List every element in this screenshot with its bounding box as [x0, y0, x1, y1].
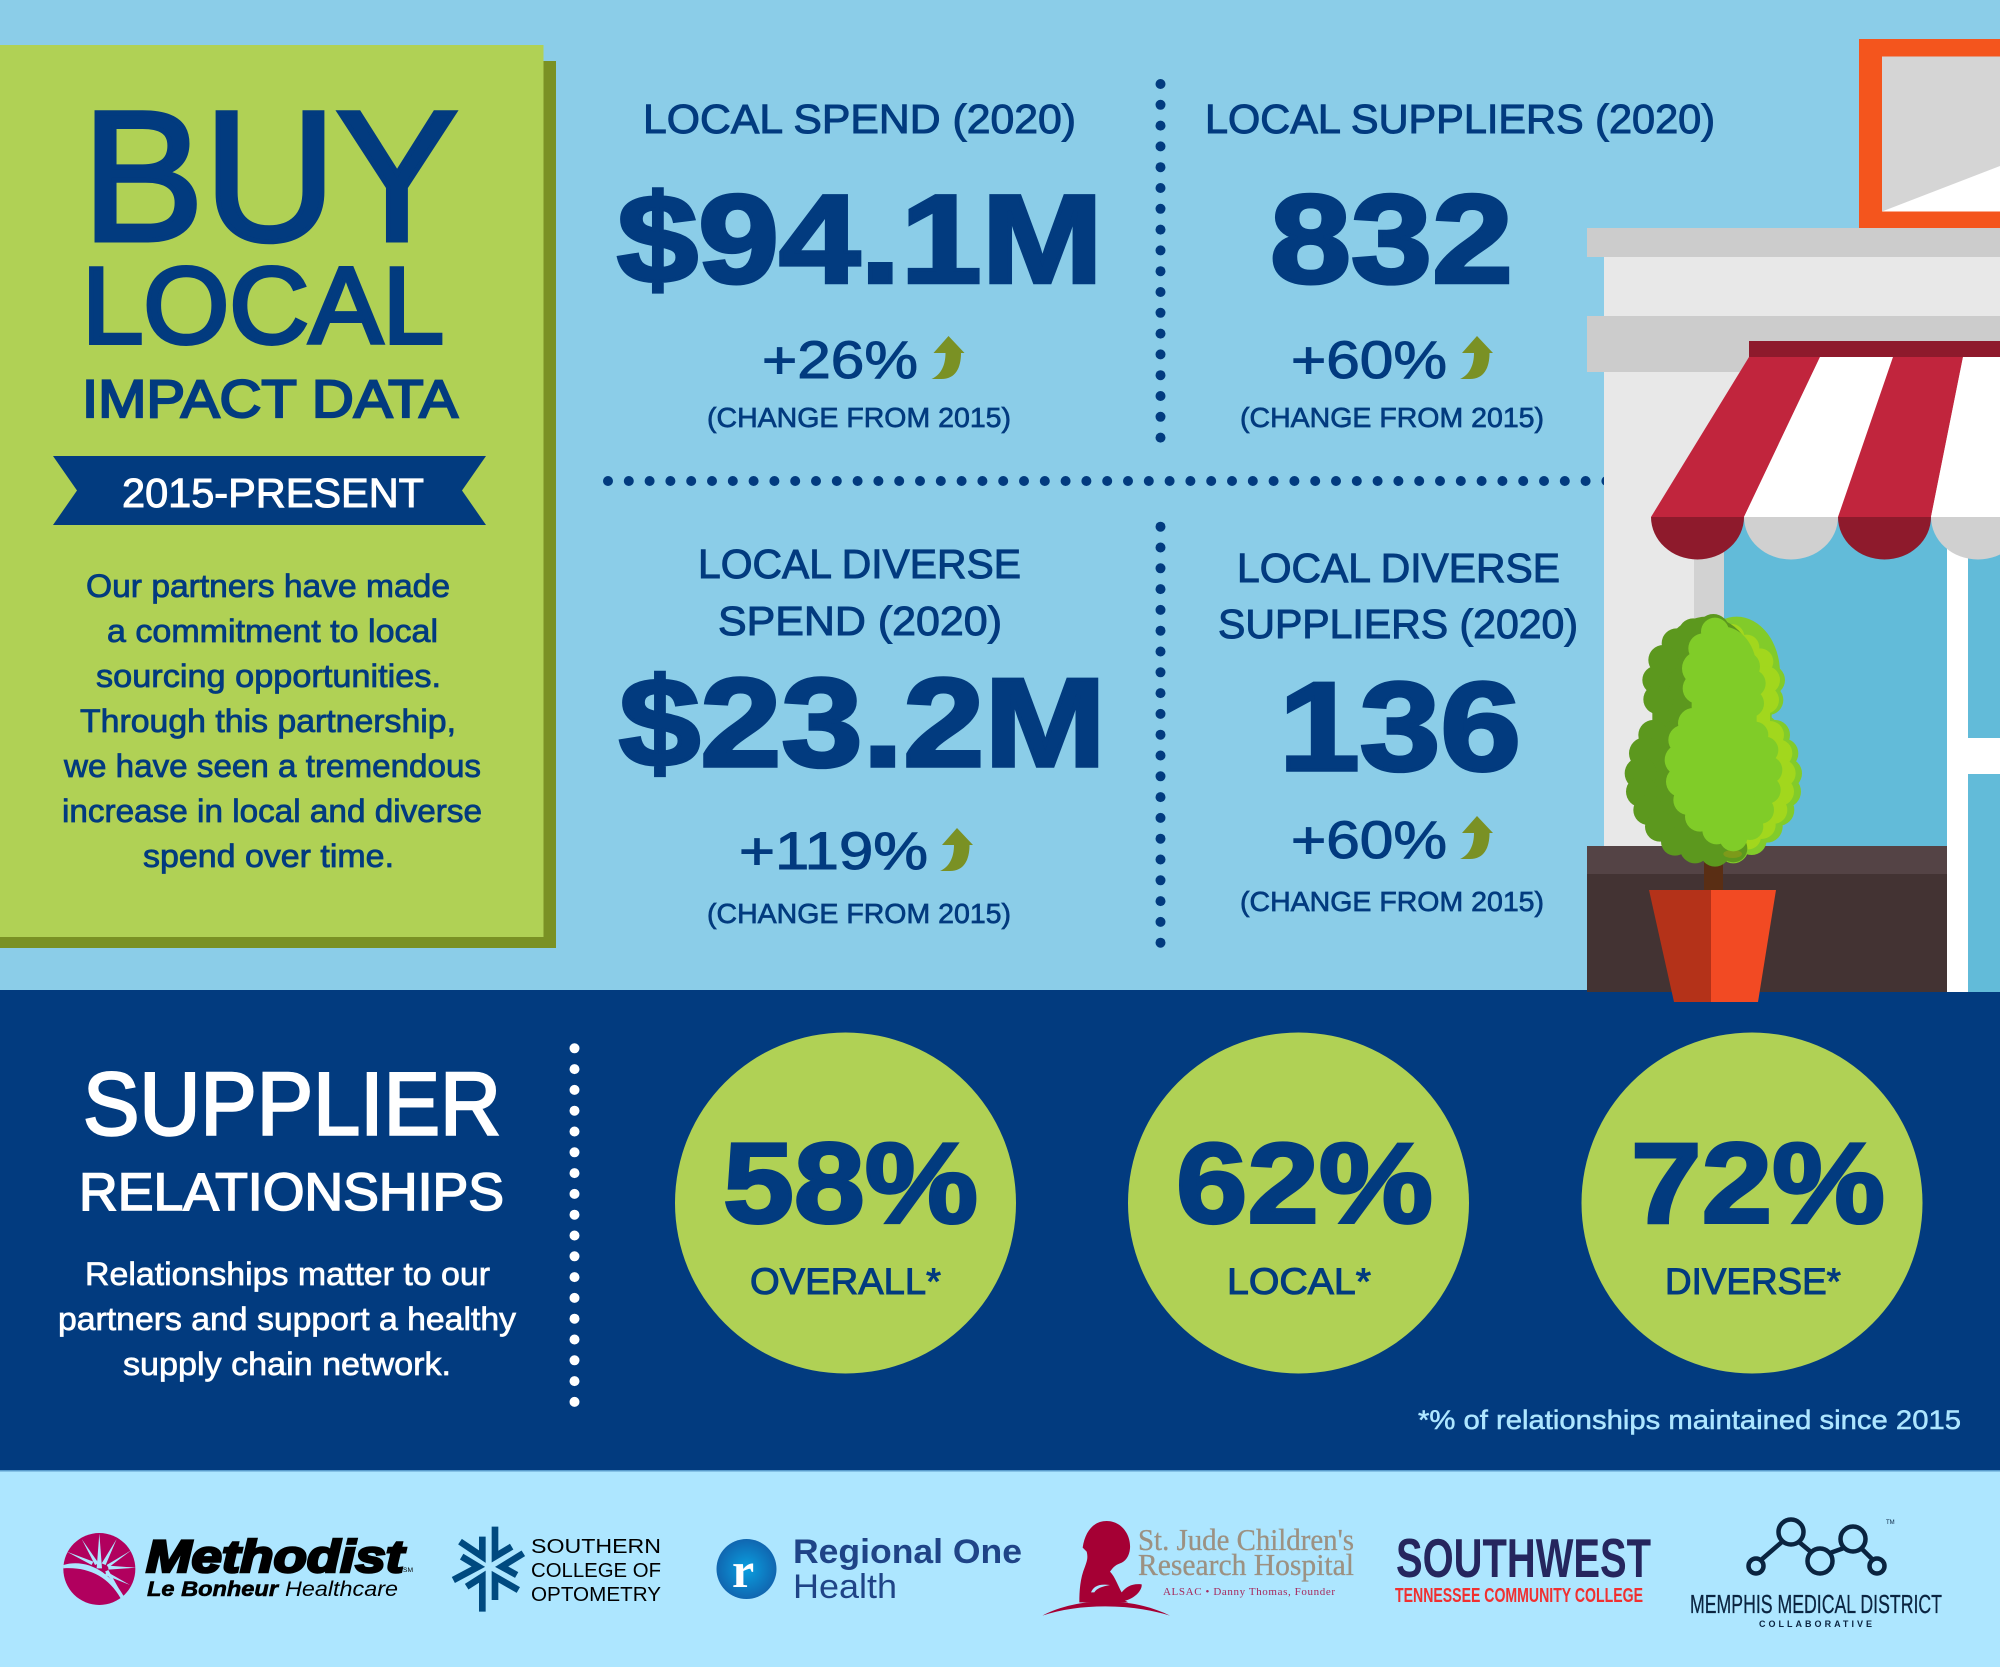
logo: Methodist Le Bonheur Healthcare: SM: [403, 1568, 413, 1574]
potted topiary tree: [1625, 614, 1802, 1002]
planter box: [1587, 846, 1947, 992]
stat: local suppliers: LOCAL SUPPLIERS (2020): [1205, 96, 1715, 142]
logo: Regional One Health: Regional One: [793, 1533, 1022, 1571]
building wall: [1587, 228, 2000, 992]
text block: partner commitment paragraph: spend over time.: [143, 838, 394, 874]
logo: Regional One Health: r: [732, 1542, 754, 1598]
dotted divider: [570, 1048, 580, 1403]
stat circle: diverse: [1582, 1032, 1922, 1374]
stat: local suppliers: +60%: [1291, 331, 1447, 390]
stat circle: diverse: DIVERSE*: [1665, 1261, 1841, 1302]
stat: local suppliers: [1205, 96, 1715, 433]
text block: partner commitment paragraph: a commitment to local: [107, 613, 438, 649]
stat: local diverse spend: [619, 541, 1106, 929]
stat: local spend: [617, 96, 1103, 433]
footnote: *% of relationships maintained since 2015: [1418, 1405, 1961, 1435]
stat circle: local: 62%: [1176, 1120, 1433, 1248]
text block: partner commitment paragraph: Through this partnership,: [80, 703, 456, 739]
stat: local spend: LOCAL SPEND (2020): [643, 96, 1076, 142]
stat circle: overall: [675, 1032, 1016, 1374]
logo: Southern College of Optometry: COLLEGE OF: [531, 1560, 661, 1582]
stat: local suppliers: 832: [1270, 168, 1513, 310]
stat: local diverse suppliers: 136: [1279, 656, 1521, 797]
heading: supplier relationships: SUPPLIER: [83, 1054, 501, 1154]
icon: up arrow: [940, 828, 973, 871]
logo: St. Jude Children's Research Hospital: Research Hospital: [1138, 1547, 1354, 1582]
stat: local diverse spend: (CHANGE FROM 2015): [707, 898, 1011, 929]
logo: St. Jude Children's Research Hospital: St. Jude Children's: [1138, 1522, 1354, 1557]
stat: local spend: +26%: [762, 331, 918, 390]
logo: Methodist Le Bonheur Healthcare: Methodist: [146, 1531, 406, 1582]
stat: local spend: (CHANGE FROM 2015): [707, 402, 1011, 433]
text block: relationships paragraph: [58, 1256, 516, 1382]
logo: Memphis Medical District Collaborative: TM: [1886, 1520, 1895, 1526]
stat: local diverse suppliers: +60%: [1291, 811, 1447, 870]
logo: St. Jude Children's Research Hospital: [1042, 1521, 1354, 1616]
text block: relationships paragraph: partners and support a healthy: [58, 1301, 516, 1337]
foliage: [1625, 614, 1802, 867]
panel: supplier relationships band: [0, 990, 2000, 1471]
striped awning: [1651, 341, 2000, 560]
foliage: front layer: [1665, 618, 1782, 851]
logo: Southwest Tennessee Community College: SOUTHWEST: [1396, 1527, 1651, 1589]
stat: local diverse suppliers: SUPPLIERS (2020): [1218, 601, 1578, 647]
stat: local suppliers: (CHANGE FROM 2015): [1240, 402, 1544, 433]
icon: up arrow: [932, 336, 964, 379]
logo: Memphis Medical District Collaborative: COLLABORATIVE: [1759, 1619, 1872, 1629]
heading: supplier relationships: RELATIONSHIPS: [79, 1163, 504, 1222]
stat circle: local: [1128, 1032, 1469, 1374]
icon: up arrow: [1460, 336, 1493, 379]
stat: local diverse spend: $23.2M: [619, 652, 1106, 793]
icon: child silhouette: [1042, 1521, 1170, 1616]
panel: partner logos footer: [0, 1470, 2000, 1667]
title: IMPACT DATA: IMPACT DATA: [82, 370, 459, 429]
stat circle: overall: OVERALL*: [750, 1261, 941, 1302]
text block: partner commitment paragraph: we have seen a tremendous: [63, 748, 481, 784]
logo: Methodist Le Bonheur Healthcare: Le Bonheur: [147, 1578, 280, 1601]
stat: local spend: $94.1M: [617, 168, 1103, 310]
stat circle: overall: 58%: [723, 1120, 978, 1248]
stat circle: diverse: 72%: [1631, 1120, 1885, 1248]
title: LOCAL: LOCAL: [82, 245, 444, 367]
logo: Regional One Health: [716, 1533, 1022, 1606]
text block: partner commitment paragraph: [62, 568, 482, 874]
text block: partner commitment paragraph: increase in local and diverse: [62, 793, 482, 829]
stat: local diverse spend: +119%: [739, 822, 928, 881]
text block: relationships paragraph: supply chain network.: [123, 1346, 451, 1382]
illustration: storefront: [1587, 39, 2000, 1002]
text block: partner commitment paragraph: sourcing opportunities.: [96, 658, 441, 694]
foliage: yellow-green layer: [1719, 624, 1796, 849]
logo: Memphis Medical District Collaborative: [1690, 1520, 1942, 1629]
stat: local diverse suppliers: LOCAL DIVERSE: [1237, 545, 1560, 591]
stat: local diverse spend: SPEND (2020): [718, 598, 1002, 644]
logo: Southwest Tennessee Community College: [1395, 1527, 1651, 1607]
heading: supplier relationships: [79, 1054, 504, 1222]
icon: connected nodes: [1748, 1520, 1884, 1574]
logo: Regional One Health: Health: [793, 1568, 897, 1606]
stat: local diverse suppliers: (CHANGE FROM 2015): [1240, 886, 1544, 917]
foliage: dark layer: [1625, 614, 1772, 867]
icon: snowflake star: [453, 1527, 523, 1612]
panel: buy local title: [0, 45, 556, 948]
logo: Methodist Le Bonheur Healthcare: Healthcare: [285, 1578, 398, 1601]
logo: Southwest Tennessee Community College: TENNESSEE COMMUNITY COLLEGE: [1395, 1585, 1643, 1607]
logo: Methodist Le Bonheur Healthcare: [63, 1531, 413, 1605]
ribbon: date range: 2015-PRESENT: [122, 470, 424, 516]
icon: up arrow: [1460, 816, 1493, 859]
stat: local diverse spend: LOCAL DIVERSE: [698, 541, 1021, 587]
title: BUY: BUY: [82, 74, 458, 280]
logo: Southern College of Optometry: OPTOMETRY: [531, 1584, 661, 1606]
ribbon: date range: [53, 456, 486, 525]
stat circle: local: LOCAL*: [1227, 1261, 1371, 1302]
shop window: [1724, 517, 2000, 992]
stat: local diverse suppliers: [1218, 545, 1578, 917]
store sign: [1859, 39, 2000, 228]
foliage: right edge layer: [1690, 617, 1802, 863]
text block: relationships paragraph: Relationships matter to our: [85, 1256, 490, 1292]
logo: Southern College of Optometry: SOUTHERN: [531, 1536, 661, 1558]
logo: St. Jude Children's Research Hospital: ALSAC • Danny Thomas, Founder: [1163, 1586, 1335, 1598]
logo: Southern College of Optometry: [453, 1527, 661, 1612]
dotted dividers between stats: [608, 79, 1610, 948]
icon: sunburst ball: [63, 1533, 136, 1605]
text block: partner commitment paragraph: Our partners have made: [86, 568, 450, 604]
